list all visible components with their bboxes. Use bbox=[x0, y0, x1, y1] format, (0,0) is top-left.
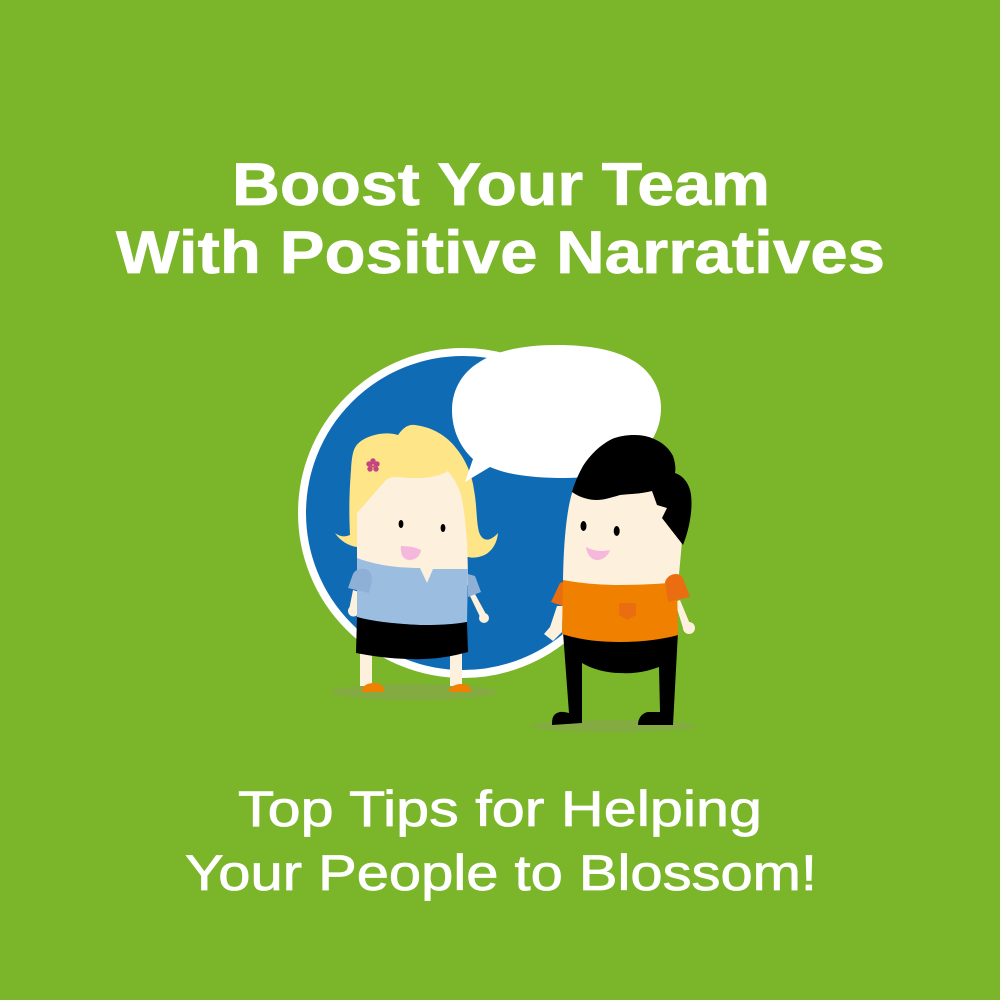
legs bbox=[360, 650, 462, 686]
left sleeve bbox=[551, 581, 566, 607]
ground shadow: woman bbox=[331, 684, 497, 700]
arms bbox=[544, 600, 695, 641]
speech bubble bbox=[452, 345, 661, 482]
man bbox=[544, 435, 695, 725]
skirt bbox=[356, 617, 468, 659]
shoes bbox=[362, 683, 471, 692]
pocket bbox=[619, 603, 636, 620]
title: With Positive Narratives bbox=[116, 219, 885, 286]
t-shirt bbox=[562, 580, 678, 642]
blouse bbox=[357, 558, 468, 625]
right sleeve bbox=[468, 574, 481, 597]
subtitle: Your People to Blossom! bbox=[185, 845, 817, 901]
face bbox=[357, 471, 468, 585]
right sleeve bbox=[665, 574, 690, 602]
arms bbox=[348, 590, 489, 623]
mouth bbox=[586, 547, 610, 560]
blue circle bbox=[302, 352, 624, 674]
subtitle: Top Tips for Helping bbox=[238, 781, 762, 837]
title bbox=[116, 151, 885, 286]
trousers bbox=[552, 632, 678, 725]
flower bbox=[366, 458, 380, 472]
eyes bbox=[580, 521, 586, 531]
illustration: two people talking bbox=[302, 345, 695, 732]
face bbox=[563, 490, 682, 590]
hair bbox=[572, 435, 692, 545]
left sleeve bbox=[348, 569, 372, 593]
title: Boost Your Team bbox=[232, 151, 770, 218]
mouth bbox=[401, 546, 421, 560]
eyes bbox=[399, 520, 403, 528]
ground shadow: man bbox=[531, 720, 695, 732]
woman bbox=[335, 425, 498, 692]
hair bbox=[335, 425, 498, 558]
subtitle bbox=[185, 781, 817, 901]
